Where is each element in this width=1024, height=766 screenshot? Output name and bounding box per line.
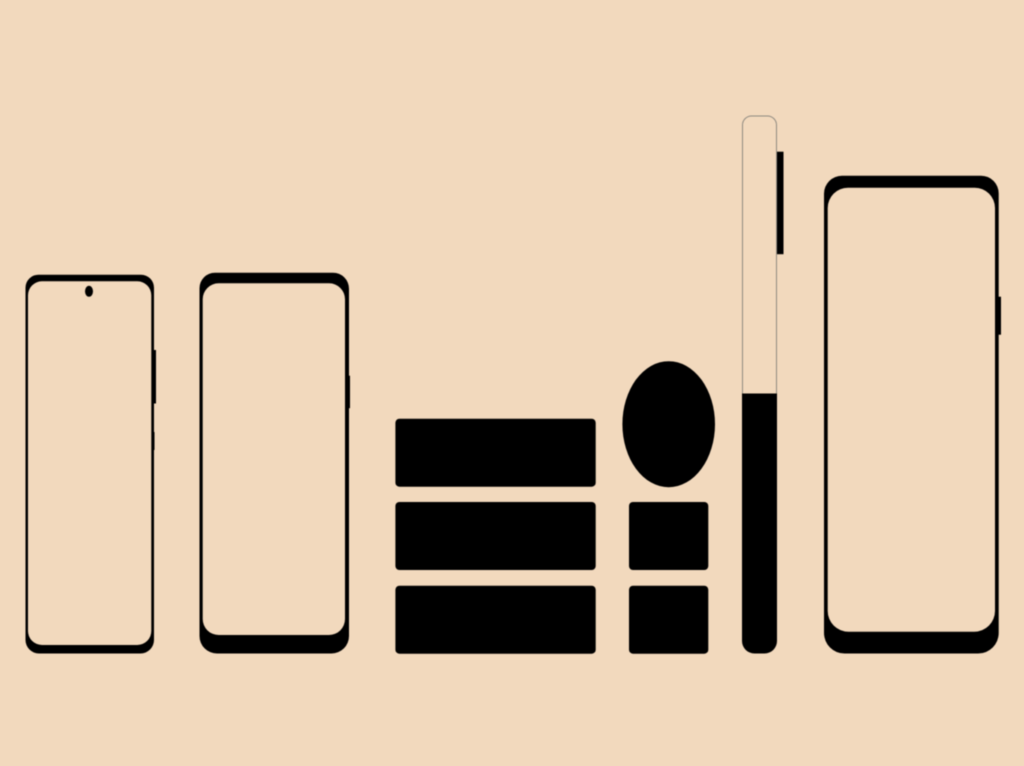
phone 1 camera — [85, 286, 93, 297]
phone 1 side button lower — [152, 432, 154, 450]
phone 1 side button upper — [152, 350, 156, 404]
tall device outline — [742, 116, 776, 416]
phone 2: thick top and bottom bezels — [200, 273, 350, 654]
small block 1 — [629, 502, 708, 570]
phone 1: thin bezel with punch-hole camera — [25, 275, 156, 654]
phone 1 frame — [25, 275, 154, 654]
small block 2 — [629, 586, 708, 654]
phone 3: large phone — [824, 176, 1001, 653]
phone 2 side button — [346, 376, 350, 408]
phone 2 frame — [200, 273, 349, 654]
tall side-view device — [742, 116, 784, 654]
tall device side button — [777, 152, 784, 254]
stacked wide bars — [395, 419, 596, 654]
tall device filled lower part — [742, 394, 777, 654]
phone 3 side button — [996, 297, 1001, 335]
wide bar 3 — [395, 586, 596, 654]
wide bar 1 — [395, 419, 596, 487]
oval — [622, 361, 715, 487]
oval and small square stack — [622, 361, 715, 654]
phone 3 frame — [824, 176, 999, 653]
wide bar 2 — [395, 502, 596, 570]
